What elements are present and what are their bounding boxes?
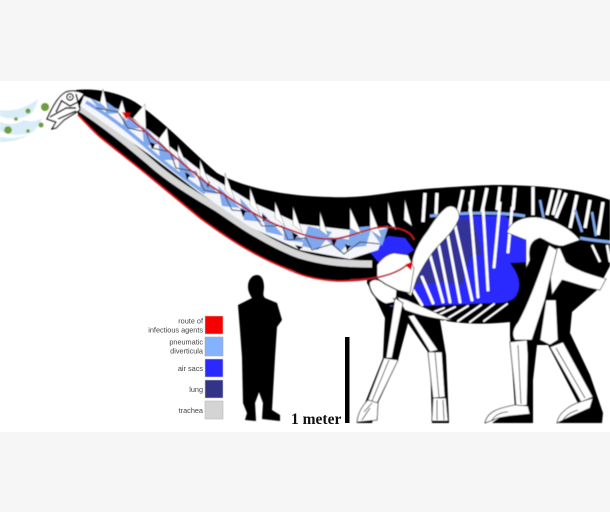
legend: air sacs: air sacs xyxy=(178,364,203,373)
legend: lung: lung xyxy=(189,385,203,394)
lung xyxy=(414,218,482,285)
legend: pneumatic diverticula xyxy=(169,337,223,356)
legend xyxy=(148,316,223,419)
scale label: 1 meter xyxy=(291,411,341,428)
icon: infectious particles xyxy=(4,103,49,134)
pelvis xyxy=(507,217,580,268)
neck vertebrae and diverticula xyxy=(80,89,412,259)
shoulder outline xyxy=(390,298,398,306)
scale bar xyxy=(345,337,350,423)
hind legs xyxy=(485,245,593,423)
route along neck underside xyxy=(78,115,368,281)
legend: trachea: trachea xyxy=(179,406,204,415)
legend: route of infectious agents: route of xyxy=(178,316,204,326)
body silhouette xyxy=(76,90,610,423)
human silhouette xyxy=(238,275,282,421)
infected breath cloud xyxy=(0,99,49,142)
legend: pneumatic diverticula: diverticula xyxy=(170,346,204,356)
dorsal spines and back diverticula xyxy=(423,187,610,262)
front legs xyxy=(357,298,448,422)
route arrows xyxy=(122,112,414,280)
head xyxy=(47,91,84,129)
scapula and coracoid xyxy=(369,206,459,320)
legend: route of infectious agents: infectious agents xyxy=(148,326,203,334)
lung and air sacs xyxy=(370,216,527,306)
dinosaur skeleton xyxy=(47,89,610,423)
ribs xyxy=(413,203,512,322)
legend: route of infectious agents xyxy=(148,316,223,334)
legend: pneumatic diverticula: pneumatic xyxy=(169,338,203,346)
trachea xyxy=(80,108,372,264)
